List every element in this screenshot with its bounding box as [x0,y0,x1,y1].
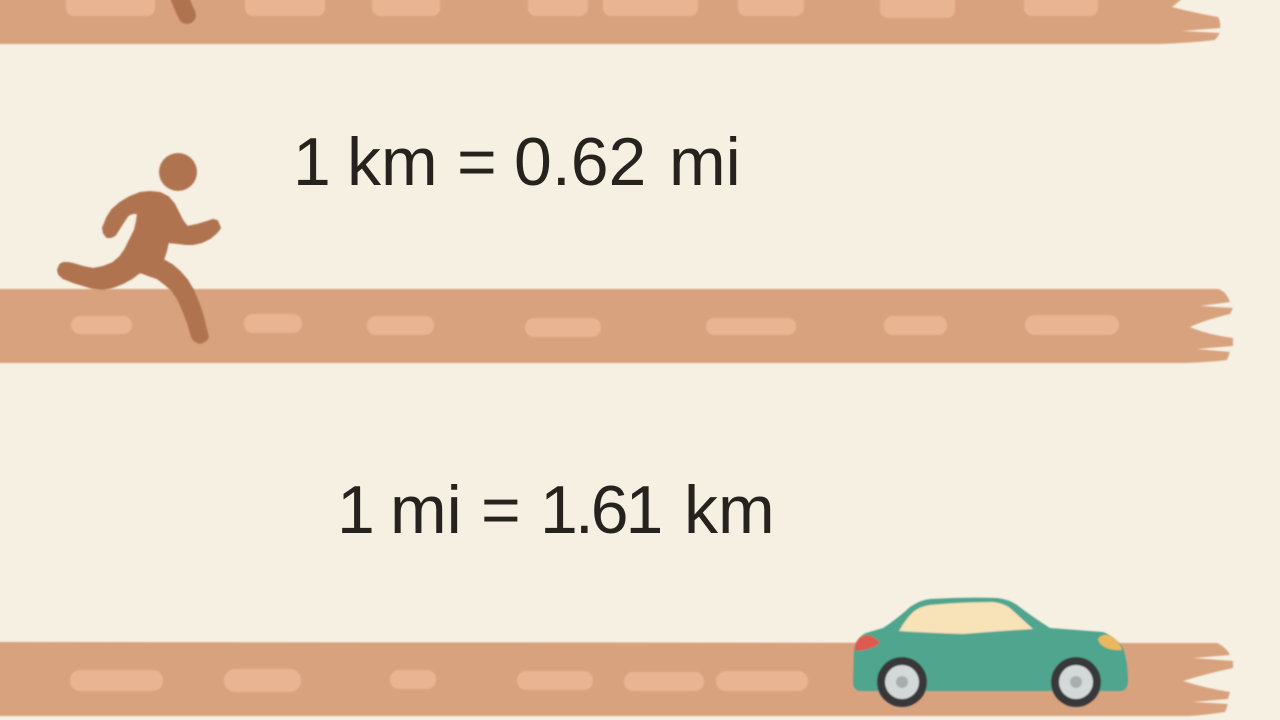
road: bottom [0,642,1233,716]
conversion: mi to km: = [481,472,521,548]
middle road dashes [71,314,1119,337]
conversion: mi to km: mi [390,472,462,548]
runner foot on top road [178,0,187,15]
road: middle [0,289,1233,363]
conversion: mi to km: 1 [337,472,375,548]
front wheel [1051,657,1101,707]
car window [899,602,1033,634]
conversion: km to mi: = [457,124,497,200]
tail light [855,635,880,651]
conversion: km to mi: km [347,124,438,200]
car body [853,598,1128,691]
icon: green car [853,598,1128,707]
conversion: km to mi: mi [669,124,741,200]
rear wheel [877,657,927,707]
conversion: km to mi: 0.62 [514,124,646,200]
bottom road dashes [70,669,808,692]
head light [1098,635,1122,650]
conversion: km to mi: 1 [293,124,331,200]
icon: running person [58,153,220,343]
conversion: mi to km: 1.61 [540,472,661,548]
road: top [0,0,1220,44]
conversion: mi to km: km [684,472,775,548]
top road dashes [66,0,1098,18]
